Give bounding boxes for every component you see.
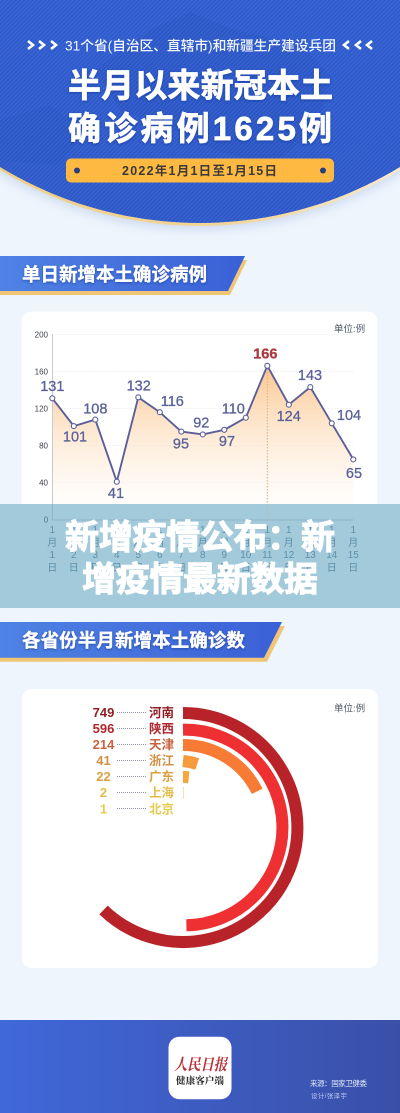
axis labels seen through banner: 日 (198, 563, 208, 574)
header banner (0, 0, 400, 230)
axis labels seen through banner: 8 (200, 550, 206, 561)
axes (52, 334, 354, 520)
axis labels seen through banner: 日 (241, 563, 251, 574)
axis labels seen through banner: 日 (155, 563, 165, 574)
logo (168, 1037, 232, 1099)
data value labels: 92 (193, 416, 209, 432)
data value labels: 104 (337, 408, 361, 424)
data value labels: 132 (127, 378, 151, 394)
axis labels seen through banner: 1 (136, 525, 142, 536)
axis labels seen through banner: 月 (198, 537, 208, 549)
banner headline (65, 519, 335, 599)
panel: daily line chart (22, 312, 378, 592)
axis labels seen through banner: 12 (283, 550, 295, 561)
peak marker line (266, 366, 268, 520)
province legend: 北京 (149, 801, 174, 816)
province legend: 214 (93, 737, 115, 752)
province legend: 河南 (149, 706, 174, 720)
axis labels seen through banner: 11 (262, 550, 273, 561)
axis labels seen through banner: 1 (114, 525, 120, 536)
axis labels seen through banner: 日 (348, 563, 358, 574)
unit label: 单位:例 (334, 323, 365, 335)
y axis labels: 120 (35, 404, 49, 413)
axis labels seen through banner: 日 (176, 563, 186, 574)
province legend: 1 (100, 801, 107, 816)
main title: 确诊病例1625例 (68, 110, 332, 147)
axis labels seen through banner: 1 (351, 525, 357, 536)
axis labels seen through banner: 1 (93, 525, 99, 536)
axis labels seen through banner: 日 (90, 563, 100, 574)
axis labels seen through banner: 1 (50, 525, 56, 536)
data value labels: 101 (63, 430, 87, 446)
data value labels: 166 (253, 346, 277, 362)
axis labels seen through banner: 1 (308, 525, 314, 536)
axis labels seen through banner: 日 (262, 563, 272, 574)
data value labels: 95 (173, 436, 189, 452)
axis labels seen through banner: 月 (262, 537, 272, 549)
axis labels seen through banner: 1 (71, 525, 77, 536)
axis labels seen through banner: 1 (200, 525, 206, 536)
section heading: provinces (0, 622, 285, 662)
axis labels seen through banner: 月 (305, 537, 315, 549)
axis labels seen through banner: 1 (50, 550, 56, 561)
province legend: 41 (96, 753, 111, 768)
data value labels: 108 (83, 402, 107, 418)
axis labels seen through banner: 7 (179, 550, 185, 561)
axis labels seen through banner: 14 (326, 550, 338, 561)
data value labels: 65 (346, 466, 362, 482)
data value labels: 116 (161, 394, 184, 410)
banner headline: 增疫情最新数据 (82, 561, 318, 599)
data value labels: 143 (298, 368, 322, 384)
axis labels seen through banner: 日 (219, 563, 229, 574)
section heading: provinces: 各省份半月新增本土确诊数 (22, 630, 245, 651)
axis labels seen through banner: 日 (112, 563, 122, 574)
axis labels seen through banner: 10 (240, 550, 252, 561)
data point markers (50, 363, 356, 484)
province legend: 广东 (149, 769, 174, 784)
axis labels seen through banner: 4 (114, 550, 120, 561)
province legend: 天津 (149, 737, 174, 752)
axis labels seen through banner: 1 (286, 525, 292, 536)
axis labels seen through banner: 月 (69, 537, 79, 549)
logo: 人民日报 (174, 1056, 229, 1074)
axis labels seen through banner: 日 (47, 563, 57, 574)
section heading: daily new cases: 单日新增本土确诊病例 (22, 264, 207, 285)
data value labels: 124 (277, 409, 301, 425)
data value labels: 131 (40, 379, 64, 395)
y axis labels (35, 330, 49, 487)
radial bars (104, 713, 297, 942)
grid lines (52, 334, 353, 482)
axis labels seen through banner: 9 (222, 550, 228, 561)
header subtitle: 31个省(自治区、直辖市)和新疆生产建设兵团 (65, 38, 336, 54)
banner headline: 新增疫情公布：新 (65, 519, 335, 557)
data line (52, 366, 353, 482)
axis labels seen through banner: 15 (348, 550, 359, 561)
axis labels seen through banner: 月 (176, 537, 186, 549)
axis labels seen through banner (44, 516, 359, 574)
province legend: 上海 (149, 785, 174, 800)
date pill: 2022年1月1日至1月15日 (122, 163, 277, 178)
province legend: 2 (100, 785, 107, 800)
area under line (52, 366, 353, 520)
leader dots (117, 712, 146, 808)
axis labels seen through banner: 月 (348, 537, 358, 549)
axis labels seen through banner: 日 (305, 563, 315, 574)
data value labels: 97 (219, 434, 235, 450)
source credits: 设计/张泽宇 (311, 1091, 348, 1100)
axis labels seen through banner: 13 (305, 550, 316, 561)
overlay banner (0, 504, 400, 608)
axis labels seen through banner: 日 (133, 563, 143, 574)
y axis labels: 160 (35, 367, 49, 376)
province legend: 22 (96, 769, 111, 784)
y axis labels: 40 (39, 478, 49, 487)
axis labels seen through banner: 3 (93, 550, 99, 561)
axis labels seen through banner: 日 (284, 563, 294, 574)
axis labels seen through banner: 1 (265, 525, 271, 536)
y axis labels: 200 (35, 330, 49, 339)
province legend: 陕西 (149, 721, 174, 736)
source credits: 来源：国家卫健委 (310, 1078, 368, 1088)
axis labels seen through banner: 1 (329, 525, 335, 536)
axis labels seen through banner: 日 (327, 563, 337, 574)
axis labels seen through banner: 6 (157, 550, 163, 561)
province legend: 596 (93, 721, 114, 736)
axis labels seen through banner: 1 (243, 525, 249, 536)
axis labels seen through banner: 2 (71, 550, 77, 561)
panel: province radial chart (22, 689, 378, 968)
data value labels (40, 346, 362, 502)
main title (68, 67, 333, 147)
axis labels seen through banner: 1 (222, 525, 228, 536)
main title: 半月以来新冠本土 (68, 67, 333, 104)
axis labels seen through banner: 1 (179, 525, 185, 536)
axis labels seen through banner: 月 (112, 537, 122, 549)
y axis labels: 80 (39, 441, 49, 450)
province legend (93, 705, 174, 816)
axis labels seen through banner: 日 (69, 563, 79, 574)
axis labels seen through banner: 月 (47, 537, 57, 549)
axis labels seen through banner: 0 (44, 516, 49, 525)
source credits (310, 1078, 368, 1100)
province legend: 749 (93, 705, 114, 720)
date pill (66, 158, 334, 182)
axis labels seen through banner: 5 (136, 550, 142, 561)
unit label: 单位:例 (334, 702, 365, 714)
axis labels seen through banner: 月 (133, 537, 143, 549)
footer (0, 1020, 400, 1113)
section heading: daily new cases (0, 256, 247, 295)
logo: 健康客户端 (176, 1075, 224, 1087)
province legend: 浙江 (149, 753, 174, 768)
axis labels seen through banner: 月 (155, 537, 165, 549)
axis labels seen through banner: 月 (327, 537, 337, 549)
axis labels seen through banner: 月 (219, 537, 229, 549)
axis labels seen through banner: 1 (157, 525, 163, 536)
axis labels seen through banner: 月 (241, 537, 251, 549)
data value labels: 41 (108, 486, 124, 502)
axis labels seen through banner: 月 (90, 537, 100, 549)
axis labels seen through banner: 月 (284, 537, 294, 549)
data value labels: 110 (222, 402, 245, 418)
